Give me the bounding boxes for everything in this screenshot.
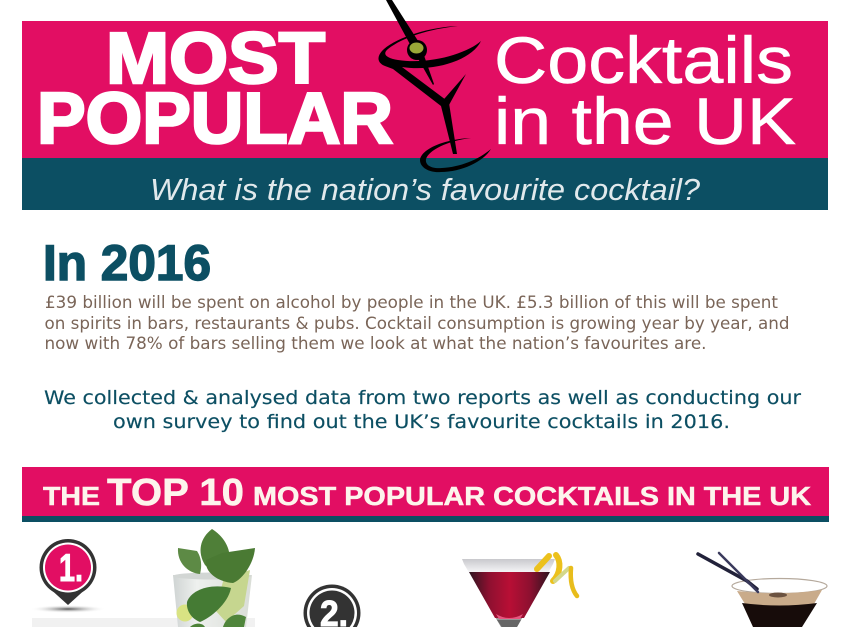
foam (737, 590, 822, 606)
red liquid (469, 572, 550, 618)
cocktail stick (386, 0, 434, 85)
glass stem (440, 102, 457, 154)
rank number: 1. (59, 547, 83, 590)
coffee beans (769, 592, 787, 598)
rank 1 pin (30, 539, 106, 613)
intro paragraph: £39 billion will be spent on alcohol by people in the UK. £5.3 billion of this will be spent (45, 293, 779, 312)
title: cocktails in the uk: Cocktails (494, 23, 793, 97)
survey paragraph: We collected & analysed data from two reports as well as conducting our (44, 387, 801, 409)
title: cocktails in the uk: in the UK (494, 84, 796, 158)
title: cocktails in the uk (494, 23, 796, 158)
banner heading: MOST POPULAR COCKTAILS IN THE UK (253, 481, 811, 511)
straws (698, 554, 757, 589)
grey card top (32, 618, 255, 627)
teal underline (22, 516, 829, 522)
title: most popular: MOST (106, 19, 325, 99)
glass stem (497, 620, 521, 627)
title: most popular: POPULAR (37, 79, 393, 159)
rank 2 pin (304, 584, 360, 627)
olive (407, 40, 427, 60)
title: most popular (37, 19, 393, 159)
icon: martini glass (378, 0, 491, 172)
glass rim and bowl (378, 26, 481, 106)
cocktail image: espresso martini (698, 553, 827, 627)
glass right side (440, 74, 466, 105)
intro paragraph (44, 293, 790, 353)
heading: in 2016: In 2016 (43, 235, 211, 291)
glass base (420, 138, 491, 172)
pin body (304, 584, 360, 627)
dark coffee (742, 603, 817, 627)
banner heading (43, 472, 811, 514)
lime (176, 604, 194, 622)
pink title band (22, 21, 828, 158)
mint leaves (201, 529, 230, 571)
intro paragraph: on spirits in bars, restaurants & pubs. Cocktail consumption is growing year by year, and (44, 314, 790, 333)
pin shadow (30, 605, 106, 613)
banner heading: TOP 10 (107, 472, 244, 514)
pink banner (22, 467, 829, 516)
glass rim (732, 578, 827, 594)
pin body (47, 586, 89, 605)
survey paragraph: own survey to find out the UK’s favourite cocktails in 2016. (113, 411, 730, 433)
survey paragraph (44, 387, 801, 433)
banner heading: THE (43, 481, 100, 511)
intro paragraph: now with 78% of bars selling them we look at what the nation’s favourites are. (44, 334, 706, 353)
cocktail image: mojito (173, 529, 255, 627)
glass bowl (462, 559, 555, 627)
lemon twist (537, 555, 577, 596)
subtitle: What is the nation’s favourite cocktail? (150, 172, 701, 207)
cocktail image: red martini (462, 555, 577, 627)
glass (173, 575, 252, 627)
header banner (22, 0, 828, 210)
teal subtitle band (22, 158, 828, 210)
section banner: top 10 (22, 467, 829, 522)
